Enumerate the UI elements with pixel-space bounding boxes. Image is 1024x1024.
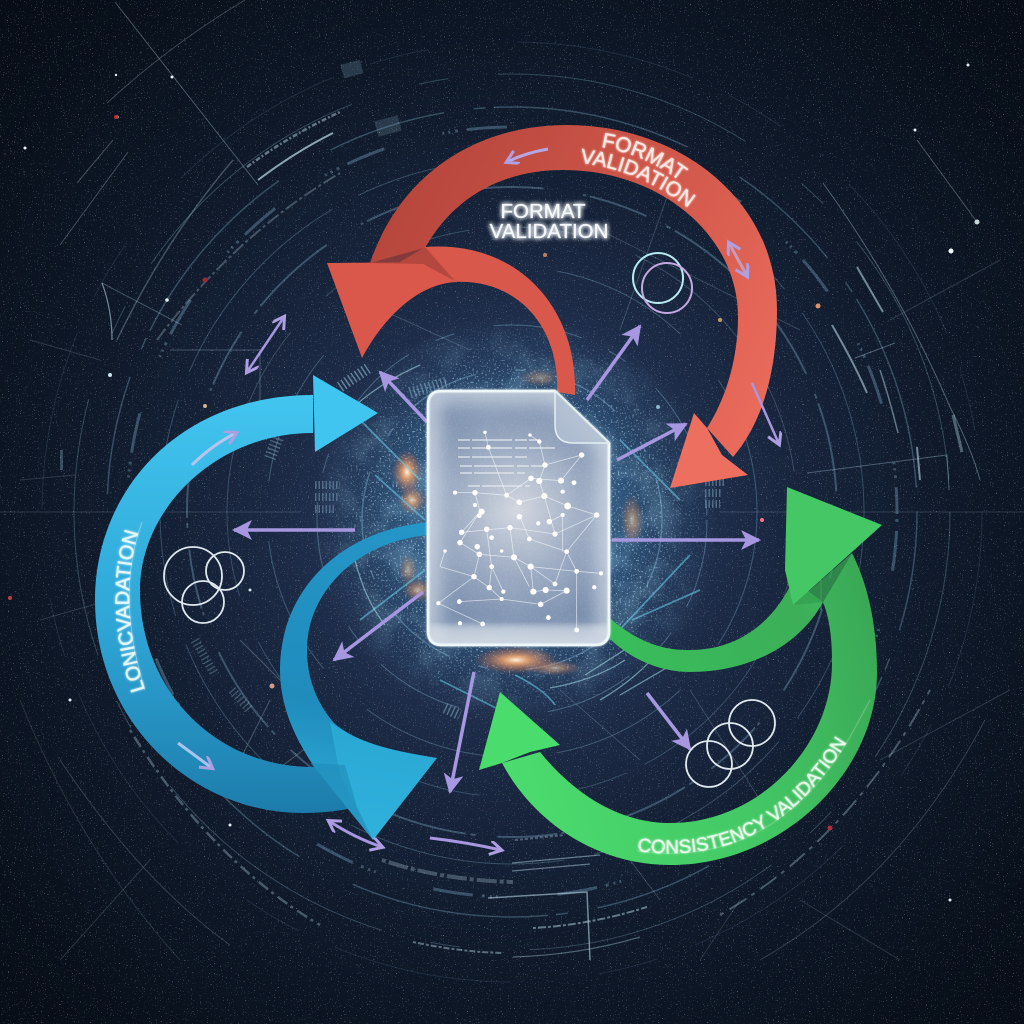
red arrow: outer loop	[370, 125, 777, 488]
folded corner	[555, 391, 609, 443]
overlapping circles icon: red section	[633, 253, 692, 313]
text lines on document	[458, 440, 555, 486]
label: format validation center	[490, 200, 608, 243]
document icon	[428, 391, 610, 647]
hatched data gauges	[195, 367, 815, 715]
label: format validation on red arrow: FORMAT	[601, 132, 690, 180]
red arrow: inner loop	[327, 247, 575, 395]
lavender connector arrows	[178, 149, 779, 850]
label: format validation center: FORMAT	[500, 200, 586, 223]
scattered glowing specks	[8, 64, 980, 902]
label: logic validation on blue arrow: LONICVADATION	[114, 528, 146, 694]
label: consistency validation on green arrow: CONSISTENCY VALIDATION	[637, 735, 848, 855]
overlapping circles icon: green section	[686, 700, 775, 787]
green arrow: inner loop	[606, 487, 882, 672]
label: format validation on red arrow: VALIDATION	[580, 148, 697, 208]
data block fragments	[60, 60, 822, 610]
label: format validation center: VALIDATION	[490, 220, 608, 243]
document body	[428, 391, 610, 647]
overlapping circles icon: blue section	[164, 547, 244, 623]
constellation network	[436, 431, 603, 632]
green arrow: outer loop	[479, 553, 877, 865]
blue arrow: inner loop	[280, 522, 437, 840]
central nebula glow	[315, 320, 715, 719]
blue arrow: outer loop	[95, 375, 378, 813]
